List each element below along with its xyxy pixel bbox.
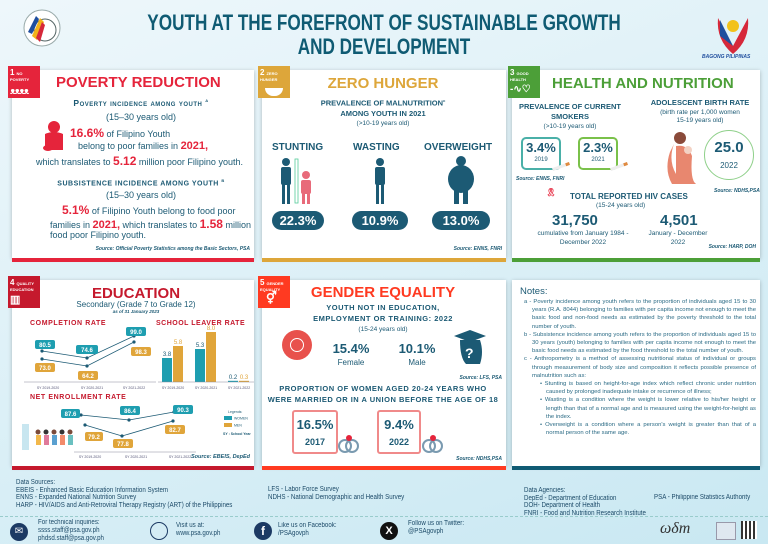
text block: data agencies: FNRI - Food and Nutrition Research Institute <box>524 510 646 517</box>
contact: facebook: f <box>261 524 265 538</box>
icon: SDG 1: 1 NO POVERTY <box>10 68 29 82</box>
block: adolescent birth rate: (birth rate per 1,000 women <box>660 109 740 116</box>
text block: data sources: ENNS - Expanded National Nutrition Survey <box>16 494 136 501</box>
stat: female: Female <box>338 358 364 367</box>
title: AND DEVELOPMENT <box>298 34 470 59</box>
panel: notes <box>510 278 762 470</box>
text block: data sources: Data Sources: <box>16 479 55 486</box>
stat: overweight <box>424 142 492 230</box>
chart: net enrollment rate: SY 2019-2020 <box>79 455 101 459</box>
block: smokers <box>516 102 628 182</box>
panel: zero hunger: (>10-19 years old) <box>357 120 409 127</box>
stat: female: 15.4% <box>333 341 369 356</box>
icon: SDG 2: 2 ZERO HUNGER <box>260 68 278 82</box>
panel: education: Source: EBEIS, DepEd <box>191 454 250 460</box>
contact: facebook <box>254 522 337 540</box>
contact: twitter <box>380 520 464 540</box>
contact: twitter: @PSAgovph <box>408 528 443 535</box>
stat: overweight: 13.0% <box>443 213 479 228</box>
stat: male: 10.1% <box>399 341 435 356</box>
stat: wasting: WASTING <box>353 142 400 153</box>
chart: net enrollment rate: 90.3 <box>177 408 189 414</box>
contact: facebook: Like us on Facebook: <box>278 522 337 529</box>
text block: subsistence incidence: 5.1% of Filipino Youth belong to food poor <box>62 203 235 217</box>
block: adolescent birth rate <box>651 98 760 194</box>
panel: zero hunger <box>258 66 508 262</box>
panel: poverty reduction <box>8 66 256 262</box>
contact: email: ✉ <box>15 526 23 537</box>
panel: notes: b - Subsistence incidence among youth refers to the proportion of individuals aged 15 to 30 years (youth) belonging to families with per capita income not enough to meet the basic food needs as estimated by the food threshold to the total number of youth. <box>524 332 756 354</box>
text block: surveys: NDHS - National Demographic and Health Survey <box>268 494 404 501</box>
subheading: AMONG YOUTH IN 2021 <box>340 108 426 118</box>
stat: overweight: OVERWEIGHT <box>424 142 492 153</box>
panel: zero hunger: Source: ENNS, FNRI <box>454 246 502 252</box>
text block: data agencies: DOH- Department of Health <box>524 502 600 509</box>
block: adolescent birth rate: 15-19 years old) <box>676 117 723 124</box>
chart: net enrollment rate: 77.8 <box>117 442 129 448</box>
panel: gender equality <box>258 276 508 470</box>
block: adolescent birth rate: Source: NDHS,PSA <box>714 188 760 194</box>
panel: notes: • Wasting is a condition where the weight is lower relative to his/her height or length than that of a normal age and is measured using the weight-for-height as the index. <box>540 397 756 420</box>
stat: stunting: 22.3% <box>280 213 316 228</box>
chart: completion rate: 64.2 <box>82 374 94 380</box>
chart: net enrollment rate: WOMEN <box>234 416 248 420</box>
panel: notes: a - Poverty incidence among youth refers to the proportion of individuals aged 15 to 30 years (R.A. 8044) belonging to families with per capita income not enough to meet the basic food and non-food needs as estimated by the poverty threshold to the total number of youth. <box>524 299 756 330</box>
chart: net enrollment rate: 82.7 <box>169 428 181 434</box>
text block: poverty incidence: belong to poor families in 2021, <box>78 140 208 152</box>
block: smokers: Source: ENNS, FNRI <box>516 176 564 182</box>
panel: gender equality: Source: LFS, PSA <box>459 375 502 381</box>
text block: data agencies <box>524 487 646 517</box>
block: smokers: 3.4% <box>526 140 556 155</box>
chart: school leaver rate: SCHOOL LEAVER RATE <box>156 320 245 327</box>
block: HIV cases <box>537 188 756 250</box>
icon: SDG 4 <box>8 276 40 308</box>
chart: school leaver rate: SY 2021-2022 <box>228 386 250 390</box>
icon: SDG 3 <box>508 66 540 98</box>
chart: net enrollment rate: SY 2020-2021 <box>125 455 147 459</box>
icon: poor person <box>43 121 63 151</box>
contact: website: www.psa.gov.ph <box>176 530 220 537</box>
badge <box>716 522 736 540</box>
panel: notes: • Overweight is a condition where a person's weight is greater than that of a normal person of the same age. <box>540 422 756 436</box>
block: HIV cases: (15-24 years old) <box>596 202 645 209</box>
chart: net enrollment rate: SY 2021-2022 <box>169 455 191 459</box>
panel: notes: • Stunting is based on height-for-age index which reflect chronic under nutrition caused by prolonged inadequate intake or recurrence of illness; <box>540 381 756 395</box>
text: PSA - Philippine Statistics Authority <box>654 494 750 501</box>
chart: school leaver rate: 5.3 <box>196 343 205 349</box>
stat: stunting <box>272 142 324 230</box>
text block: poverty incidence: (15–30 years old) <box>106 112 176 122</box>
text block: data sources <box>16 479 232 509</box>
panel: notes: c - Anthropometry is a method of assessing nutritional status of individual or groups through measurement of body size and composition it reflects possible presence of malnutrition such as: <box>524 356 756 379</box>
subheading <box>321 98 446 118</box>
logo: Bagong Pilipinas <box>702 18 750 60</box>
chart: net enrollment rate: MEN <box>234 424 242 428</box>
text block: subsistence incidence: food poor Filipino youth. <box>50 230 146 240</box>
panel: education: as of 31 January 2023 <box>113 309 159 314</box>
stat: 2022: 9.4% <box>384 417 414 432</box>
heading: GENDER EQUALITY <box>311 284 455 301</box>
block: smokers: 2021 <box>591 157 605 163</box>
heading: EDUCATION <box>92 285 180 302</box>
icon: SDG 4: ▥ <box>10 294 20 306</box>
heading: ZERO HUNGER <box>328 75 438 92</box>
stat: 2017 <box>292 410 338 454</box>
signature: ωδm <box>660 520 690 537</box>
chart: completion rate <box>24 320 156 390</box>
icon: SDG 4: 4 QUALITY EDUCATION <box>10 278 34 292</box>
panel: education <box>8 276 256 470</box>
block: HIV cases: TOTAL REPORTED HIV CASES <box>570 192 688 201</box>
icon: SDG 1 <box>8 66 40 98</box>
icon: rings <box>338 435 359 453</box>
icon: SDG 5: 5 GENDER EQUALITY <box>260 278 284 292</box>
panel: gender equality: EMPLOYMENT OR TRAINING: 2022 <box>313 314 453 323</box>
chart: net enrollment rate: 86.4 <box>124 409 136 415</box>
icon: graduate head <box>454 330 486 364</box>
chart: net enrollment rate: 79.2 <box>88 435 100 441</box>
title: YOUTH AT THE FOREFRONT OF SUSTAINABLE GROWTH <box>147 10 621 35</box>
contact: email <box>10 519 104 542</box>
contact: twitter: X <box>385 525 393 537</box>
chart: completion rate: 99.0 <box>130 330 142 336</box>
text block: surveys <box>268 486 404 501</box>
block: smokers: PREVALENCE OF CURRENT <box>519 102 621 111</box>
chart: completion rate: 74.6 <box>81 348 93 354</box>
contact: website: Visit us at: <box>176 522 204 529</box>
panel: poverty reduction: Source: Official Poverty Statistics among the Basic Sectors, PSA <box>96 246 250 252</box>
icon: SDG 3: -∿♡ <box>510 84 531 95</box>
text block: poverty incidence <box>36 98 243 168</box>
chart: net enrollment rate: SY : School Year <box>223 432 251 436</box>
stat: 2022 <box>377 410 421 454</box>
chart: school leaver rate: SY 2020-2021 <box>195 386 217 390</box>
text block: subsistence incidence: SUBSISTENCE INCIDENCE AMONG YOUTH b <box>57 178 225 187</box>
text block: surveys: LFS - Labor Force Survey <box>268 486 339 493</box>
logo: PSA <box>24 10 60 46</box>
chart: completion rate: SY 2019-2020 <box>37 386 59 390</box>
text block: poverty incidence: 16.6% of Filipino Youth <box>70 126 170 140</box>
chart: net enrollment rate: Legends: <box>228 410 242 414</box>
text block: poverty incidence: Poverty incidence among youth a <box>73 98 209 108</box>
contact: facebook: /PSAgovph <box>278 530 309 537</box>
block: smokers: SMOKERS <box>551 112 589 121</box>
stat: male: Male <box>408 358 426 367</box>
panel: gender equality: Source: NDHS,PSA <box>456 456 502 462</box>
chart: completion rate: 73.0 <box>39 366 51 372</box>
text block: subsistence incidence <box>50 178 251 240</box>
stat: stunting: STUNTING <box>272 142 323 153</box>
block: adolescent birth rate: 2022 <box>720 161 738 170</box>
block: smokers: 2019 <box>534 157 548 163</box>
block: HIV cases: 4,501 <box>660 212 698 229</box>
block: adolescent birth rate: 25.0 <box>714 139 744 156</box>
chart: school leaver rate: 0.3 <box>240 375 249 381</box>
logo: Bagong Pilipinas: BAGONG PILIPINAS <box>702 54 750 60</box>
panel: education: Secondary (Grade 7 to Grade 12) <box>76 300 196 309</box>
panel: notes: Notes: <box>520 286 547 297</box>
block: smokers: (>10-19 years old) <box>544 123 596 130</box>
panel: gender equality: YOUTH NOT IN EDUCATION, <box>326 303 440 312</box>
contact: twitter: Follow us on Twitter: <box>408 520 464 527</box>
contact: website <box>150 522 220 540</box>
block: HIV cases: Source: HARP, DOH <box>709 244 756 250</box>
text block: data agencies: Data Agencies: <box>524 487 565 494</box>
block: HIV cases: cumulative from January 1984 - <box>537 230 629 237</box>
contact: email: For technical inquiries: <box>38 519 100 526</box>
chart: net enrollment rate <box>22 394 251 459</box>
panel: gender equality: (15-24 years old) <box>358 326 408 333</box>
stat: wasting: 10.9% <box>362 213 398 228</box>
heading: POVERTY REDUCTION <box>56 74 221 91</box>
block: HIV cases: December 2022 <box>560 238 606 246</box>
icon: SDG 1: ᴥᴥᴥᴥ <box>10 86 28 96</box>
chart: completion rate: 80.5 <box>39 343 51 349</box>
text block: data sources: EBEIS - Enhanced Basic Education Information System <box>16 487 168 494</box>
chart: net enrollment rate: 87.6 <box>65 412 77 418</box>
stat: female <box>333 341 370 367</box>
stat: male <box>399 341 436 367</box>
panel: gender equality: PROPORTION OF WOMEN AGED 20-24 YEARS WHO <box>279 384 487 393</box>
icon: SDG 2 <box>258 66 290 98</box>
chart: school leaver rate <box>156 320 254 390</box>
chart: completion rate: COMPLETION RATE <box>30 320 106 327</box>
block: HIV cases: 31,750 <box>552 212 598 229</box>
text block: subsistence incidence: (15–30 years old) <box>106 190 176 200</box>
subheading: PREVALENCE OF MALNUTRITIONc <box>321 98 445 108</box>
title <box>147 10 621 59</box>
chart: net enrollment rate: NET ENROLLMENT RATE <box>30 394 126 401</box>
chart: school leaver rate: 5.8 <box>174 340 183 346</box>
stat: 2017: 2017 <box>305 437 325 447</box>
chart: school leaver rate: 3.8 <box>163 352 172 358</box>
icon: no-work circle <box>282 330 312 360</box>
contact: email: ssss.staff@psa.gov.ph <box>38 527 100 534</box>
stat: 2022: 2022 <box>389 437 409 447</box>
stat: wasting <box>352 142 408 230</box>
block: smokers: 2.3% <box>583 140 613 155</box>
icon: SDG 5 <box>258 276 290 308</box>
block: adolescent birth rate: ADOLESCENT BIRTH RATE <box>651 98 749 107</box>
icon: SDG 3: 3 GOOD HEALTH <box>510 68 529 82</box>
icon: SDG 5: ⚥ <box>266 291 277 305</box>
block: HIV cases: 🎗 <box>546 188 556 197</box>
chart: school leaver rate: 8.0 <box>207 326 216 332</box>
chart: completion rate: SY 2020-2021 <box>81 386 103 390</box>
block: HIV cases: 2022 <box>671 238 685 246</box>
text block: poverty incidence: which translates to 5.12 million poor Filipino youth. <box>36 154 243 168</box>
panel: health and nutrition <box>508 66 762 262</box>
chart: completion rate: 98.3 <box>135 350 147 356</box>
block: HIV cases: January - December <box>649 230 707 237</box>
contact: email: phdsd.staff@psa.gov.ph <box>38 535 104 542</box>
text block: data sources: HARP - HIV/AIDS and Anti-Retroviral Therapy Registry (ART) of the Philippines <box>16 502 232 509</box>
icon: graduate head: ? <box>465 345 474 361</box>
chart: completion rate: SY 2021-2022 <box>123 386 145 390</box>
text block: data agencies: DepEd - Department of Education <box>524 495 616 502</box>
chart: school leaver rate: 0.2 <box>229 375 238 381</box>
text block: subsistence incidence: families in 2021, which translates to 1.58 million <box>50 217 251 231</box>
panel: gender equality: WERE MARRIED OR IN A UNION BEFORE THE AGE OF 18 <box>268 395 498 404</box>
stat: 2017: 16.5% <box>297 417 333 432</box>
chart: school leaver rate: SY 2019-2020 <box>162 386 184 390</box>
heading: HEALTH AND NUTRITION <box>552 75 734 92</box>
